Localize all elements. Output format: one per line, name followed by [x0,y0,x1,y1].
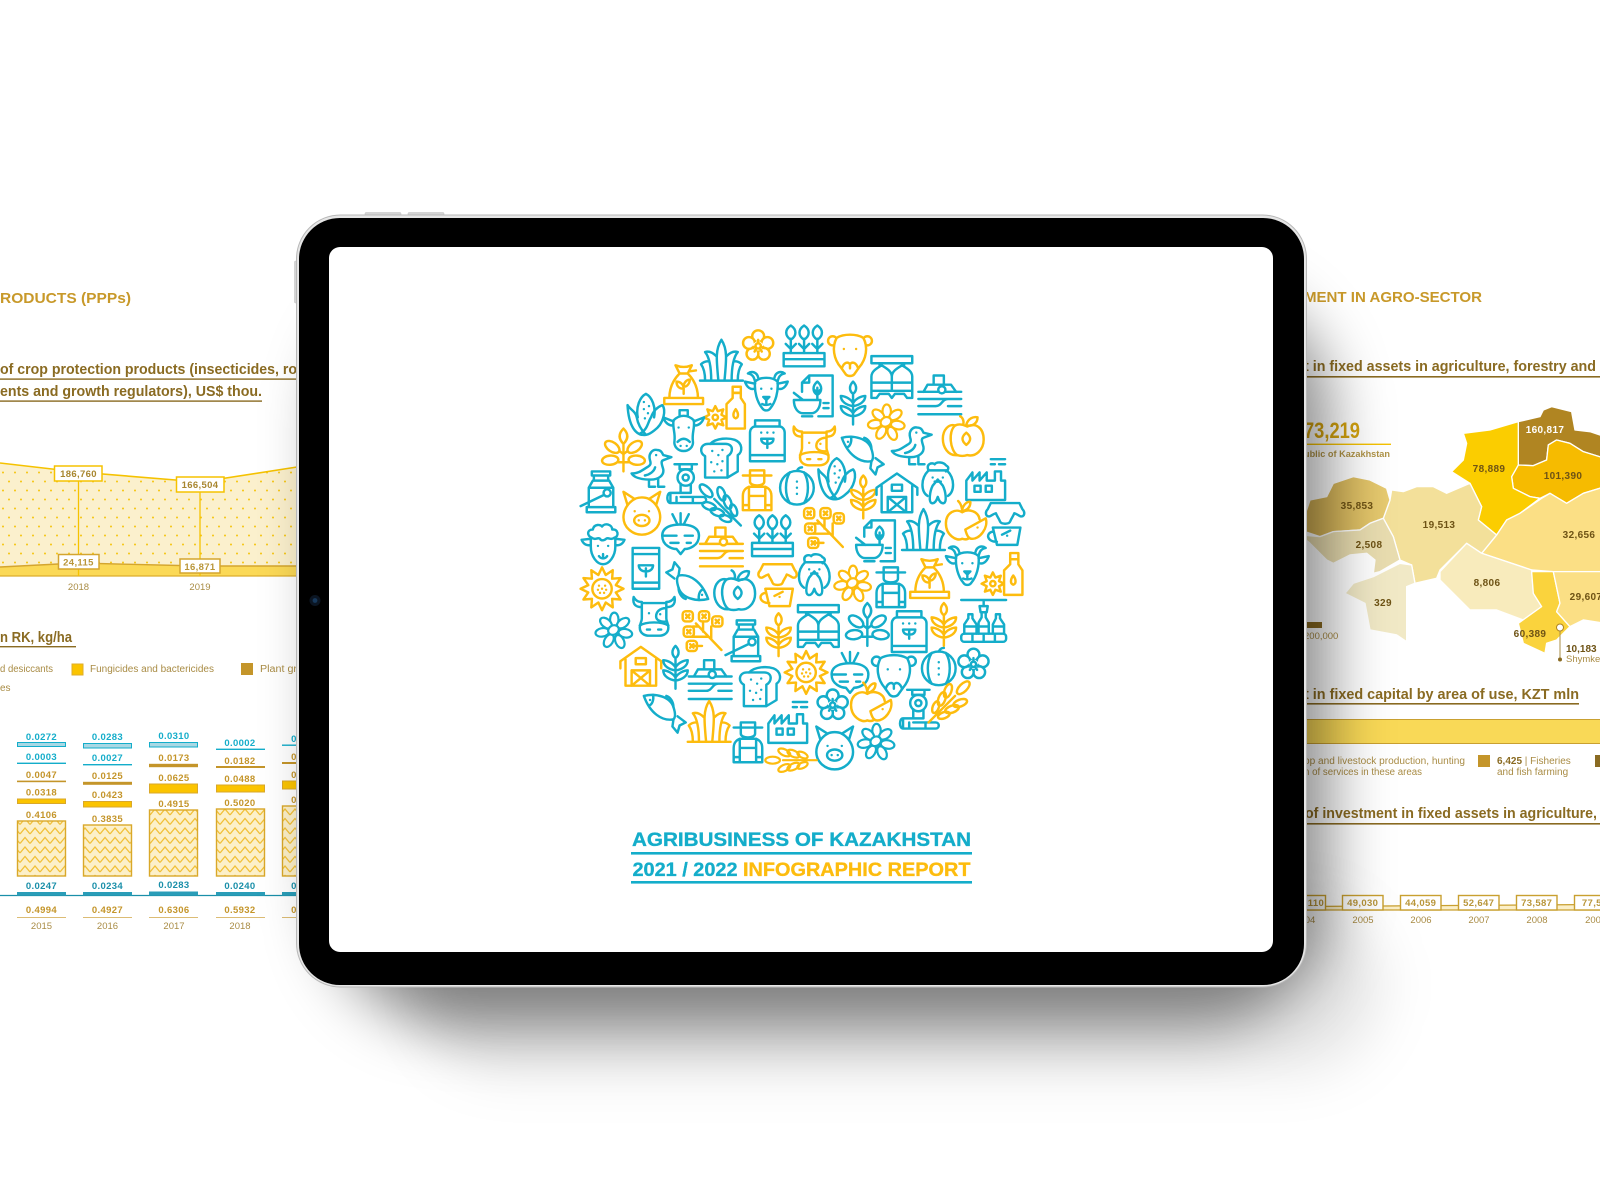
column: 2016: 0.0283 [92,732,123,743]
legend: pesticide categories: d desiccants [0,664,53,675]
subheading: crop protection products [0,362,297,402]
icon: seed bag [664,365,703,404]
column: 2016: 0.4927 [92,905,123,916]
year axis labels: 2005 [1352,915,1374,926]
map labels: 2,508 [1356,540,1382,551]
map labels: 60,389 [1514,629,1546,640]
icon: tractor field [689,660,732,699]
icon: bread [740,667,780,706]
column: 2015: 0.0047 [26,770,57,781]
icon: document and bowl [856,520,895,561]
icon: flower [958,649,989,678]
map labels: 19,513 [1423,520,1455,531]
value box: 2004 [1296,896,1326,910]
title: Agribusiness of Kazakhstan: AGRIBUSINESS OF KAZAKHSTAN [632,829,971,851]
icon: grass [700,340,743,381]
icon: duck [632,450,671,487]
year axis labels: 2008 [1526,915,1548,926]
tablet silver frame [296,215,1306,987]
icon: wheat ear [929,679,972,722]
axis label: 2018: 2018 [68,582,89,593]
column: 2016: 0.3835 [92,814,123,825]
column: 2015 [17,732,66,932]
map labels [1341,425,1600,640]
icon: wheat [841,382,865,424]
subheading: dynamics of investment: of investment in fixed assets in agriculture, [1305,806,1597,822]
map labels: 329 [1374,598,1392,609]
icon: milling machine [667,464,706,503]
icon: jar [892,611,927,652]
column: 2018: 0.5020 [224,798,256,809]
data label: 16,871 [180,559,220,573]
key figure: republic total [1304,418,1391,460]
subheading: crop protection products: ents and growth regulators), US$ thou. [0,384,262,400]
map labels: 78,889 [1473,464,1505,475]
column: 2015: 0.0318 [26,788,57,798]
year axis labels: 2006 [1410,915,1432,926]
data label: 166,504: 166,504 [182,480,219,491]
legend: pesticide categories: Fungicides and bactericides [90,664,214,675]
year axis labels: 2007 [1468,915,1490,926]
icon: fish [644,695,686,733]
round cluster of agriculture line icons [581,326,1024,788]
icon: wheat [932,603,956,646]
data label: 186,760: 186,760 [60,469,97,480]
icon: goat [745,372,788,410]
stacked column chart: pesticide use per hectare [0,731,298,932]
icon: sprouts in planter [752,515,793,556]
column: 2015: 2015 [31,921,52,932]
map callout: Shymkent [1556,624,1600,665]
data label: 24,115 [58,554,99,569]
column: partially hidden 2019: 0 [291,770,297,781]
icon: sunflower [785,651,828,694]
stacked bar: fixed capital [1304,720,1600,744]
icon: barn [877,473,917,512]
legend: pesticide categories [0,663,298,694]
icon: apple and slice [851,683,891,721]
value box: 2009 [1574,896,1600,910]
icon: wheat [851,476,876,518]
map labels: 160,817 [1526,425,1564,436]
column: 2018: 0.0488 [224,774,256,785]
icon: wheat [766,613,791,656]
icon: duck [892,427,932,464]
icon: horse head [663,410,704,451]
value box: 2006 [1400,896,1441,910]
icon: udder and cup [758,564,797,606]
column: 2017: 0.4915 [158,799,190,810]
icon: corn [628,394,664,435]
icon: bread [701,439,741,478]
key figure: republic total: 73,219 [1304,418,1360,443]
data label: 186,760 [54,466,102,481]
timeline chart: investment by year [1296,896,1600,926]
subheading: investment in fixed assets: t in fixed assets in agriculture, forestry and [1304,359,1596,375]
icon: pig [623,492,660,535]
value box: 2006: 44,059 [1405,898,1436,909]
icon: fish [842,437,884,474]
icon: apple [714,570,755,610]
icon: pig [816,727,853,769]
map scale legend: 200,000 [1304,631,1338,642]
value box: 2005: 49,030 [1347,898,1378,909]
icon: seeds [867,404,905,441]
icon: sunflower oil [982,553,1022,595]
column: 2018: 0.0182 [224,756,256,767]
icon: melon [780,467,814,505]
column: 2018: 0.0240 [224,881,256,892]
axis label: 2019: 2019 [189,582,211,593]
icon: cow [633,597,675,636]
icon: seed packet [633,548,659,589]
data label: 24,115: 24,115 [63,558,94,568]
column: 2017: 0.6306 [158,905,190,916]
map callout: Shymkent: 10,183 [1566,644,1597,655]
map labels: 101,390 [1544,471,1582,482]
title: Agribusiness of Kazakhstan: 2021 / 2022 INFOGRAPHIC REPORT [632,859,971,881]
icon: farmer [877,567,905,607]
key figure: republic total: ublic of Kazakhstan [1304,449,1390,460]
legend: area of use: op and livestock production, hunting [1304,756,1465,767]
value box: 2007: 52,647 [1463,898,1494,909]
legend: area of use: 6,425 | Fisheries [1497,756,1571,767]
column: 2016: 0.0125 [92,771,123,782]
column: 2016: 0.0027 [92,753,123,764]
icon: seeds [595,613,633,650]
column: partially hidden 2019: 0 [291,795,297,806]
icon: milling machine [900,690,939,729]
icon: rapeseed [683,611,722,651]
legend: area of use [1304,755,1600,778]
tablet cast shadow: main [325,285,1330,1025]
tablet camera [310,595,320,606]
icon: bear [872,655,916,696]
column: 2017: 0.0625 [158,773,190,784]
icon: grass [688,701,731,742]
heading: investment in agro-sector: MENT IN AGRO-SECTOR [1304,289,1482,306]
icon: seed bag [910,559,949,598]
column: 2015: 0.0003 [26,752,57,763]
icon: beet [832,652,868,693]
area chart: import of crop protection products [0,463,297,593]
icon: silos [871,356,912,398]
icon: wheat ear [698,482,741,526]
column: partially hidden 2019: 0 [291,905,297,916]
legend: pesticide categories: es [0,683,11,694]
icon: udder and cup [986,503,1024,545]
icon: sprouts in planter [784,326,824,366]
icon: document and bowl [794,376,833,416]
icon: milk can [581,471,615,512]
map labels: 32,656 [1563,530,1595,541]
year axis labels [1305,915,1600,926]
icon: wheat [663,646,688,689]
tablet black bezel [299,218,1304,985]
map callout: Shymkent: Shymke [1566,654,1600,665]
value box: 2007 [1458,896,1499,910]
column: 2015: 0.4994 [26,905,57,916]
subheading: crop protection products: of crop protection products (insecticides, ro [0,362,297,378]
icon: wheat ear [762,733,817,788]
icon: grass [902,509,945,550]
column: 2015: 0.0247 [26,881,57,892]
icon: fish [666,562,708,600]
column: 2016: 0.0423 [92,790,123,801]
column: 2018: 0.0002 [224,738,256,749]
column: 2017: 0.0173 [158,753,190,764]
tablet side buttons [294,212,444,303]
icon: leaf branch [846,603,889,646]
legend: pesticide categories: Plant gr [260,664,298,675]
value box: 2004: 110 [1308,898,1324,909]
column: 2015: 0.0272 [26,732,57,743]
icon: seeds [834,566,872,603]
column: partially hidden 2019: 0 [291,752,297,763]
icon: rapeseed [804,508,844,548]
data label: 166,504 [176,477,224,492]
icon: jar [750,420,785,461]
year axis labels: 04 [1305,915,1315,926]
icon: factory [966,459,1005,500]
tablet cast shadow: soft tail [420,900,1380,1070]
icon: barn [620,647,661,686]
legend: area of use: n of services in these areas [1304,767,1422,778]
column: 2017: 0.0283 [158,880,190,891]
icon: apple and slice [946,501,986,539]
column: 2018: 2018 [229,921,251,932]
icon: farmer [743,470,771,510]
icon: sheep [582,524,624,564]
icon: bottling line [961,600,1006,642]
column: 2017 [149,731,198,932]
column: 2018 [216,738,265,932]
subheading: kg/ha: n RK, kg/ha [0,630,73,646]
column: partially hidden 2019 [282,734,298,918]
value box: 2005 [1342,896,1383,910]
map scale legend [1304,622,1338,642]
icon: farmer [734,722,762,762]
subheading: fixed capital by area of use: t in fixed capital by area of use, KZT mln [1304,687,1579,703]
map labels: 8,806 [1474,578,1500,589]
title: Agribusiness of Kazakhstan [631,829,972,884]
value box: 2008: 73,587 [1521,898,1552,909]
icon: flower [743,330,773,360]
icon: tractor field [700,528,743,566]
legend: area of use: and fish farming [1497,767,1568,778]
column: 2018: 0.5932 [224,905,256,916]
column: partially hidden 2019: 0 [291,881,297,892]
icon: apple [943,416,984,456]
map labels: 35,853 [1341,501,1373,512]
icon: seeds [857,724,895,761]
icon: rooster [922,462,953,503]
icon: factory [768,702,807,743]
column: 2017: 0.0310 [158,731,190,742]
data label: 16,871: 16,871 [184,562,216,573]
heading: plant protection products: RODUCTS (PPPs) [0,290,131,307]
icon: leaf branch [602,429,645,471]
icon: corn [818,458,855,499]
column: partially hidden 2019: 0 [291,734,297,745]
icon: silos [798,605,839,647]
icon: beet [662,513,699,554]
icon: goat [946,547,989,585]
icon: cow [794,427,835,465]
icon: flower [818,689,848,719]
column: 2015: 0.4106 [26,810,57,821]
icon: tractor field [918,376,961,414]
column: 2016: 2016 [97,921,118,932]
icon: bear [828,335,872,376]
column: 2017: 2017 [163,921,185,932]
icon: melon [922,648,956,685]
tablet screen [329,247,1273,952]
column: 2016: 0.0234 [92,881,123,892]
icon: sunflower [581,567,623,610]
choropleth map of Kazakhstan regions [1300,407,1600,665]
icon: sunflower oil [704,387,745,429]
icon: rooster [799,554,830,595]
value box: 2008 [1516,896,1557,910]
icon: milk can [726,620,760,661]
column: 2016 [83,732,132,932]
